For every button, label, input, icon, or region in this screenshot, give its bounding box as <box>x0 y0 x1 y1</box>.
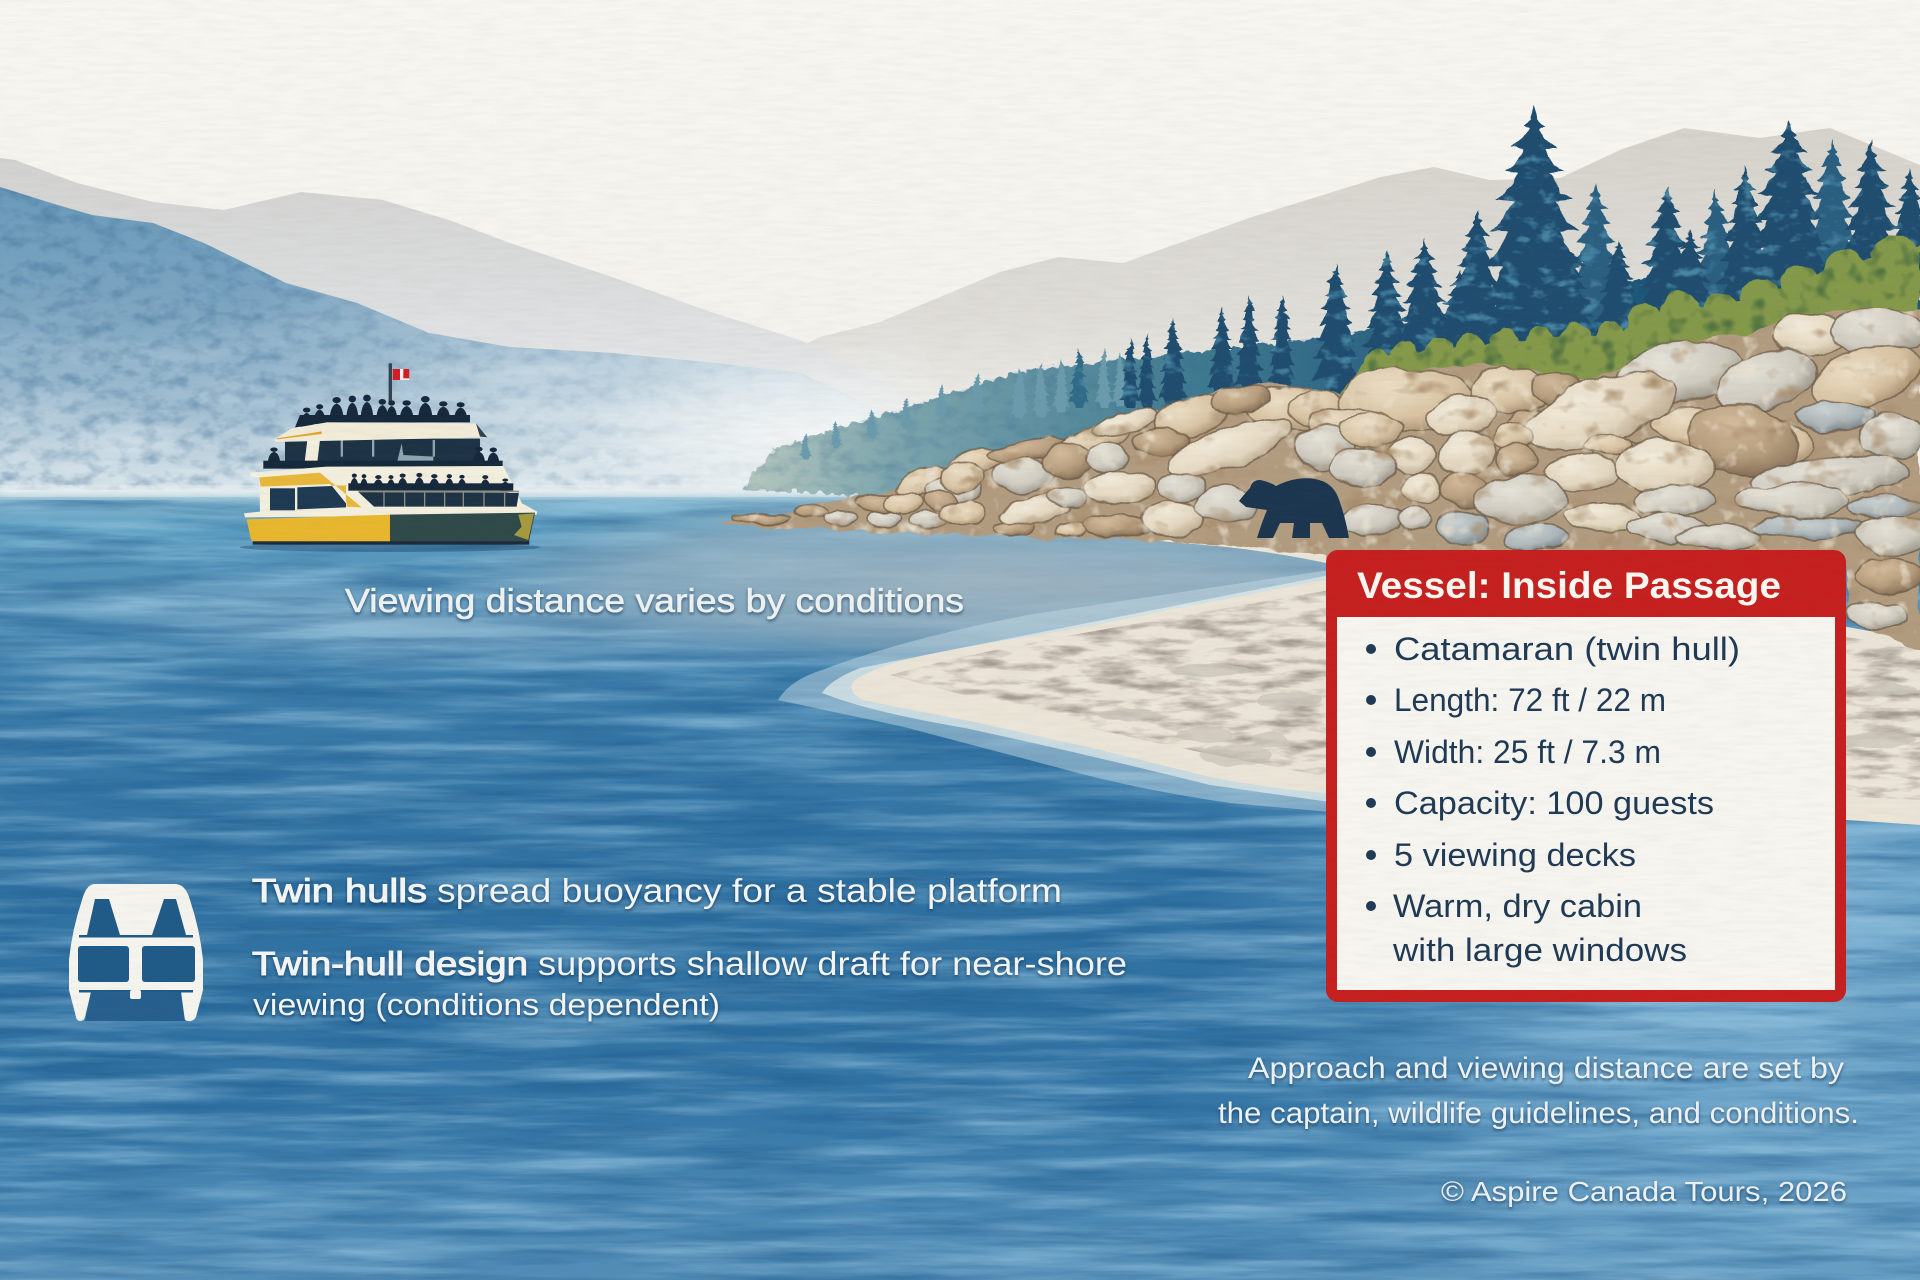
upper window highlights <box>341 440 435 464</box>
canadian flag <box>393 369 409 380</box>
yellow side panel <box>259 473 362 507</box>
spec: cabin: Warm, dry cabin <box>1393 888 1642 924</box>
spec: cabin: with large windows <box>1392 932 1687 968</box>
note line two: the captain, wildlife guidelines, and conditions. <box>1218 1097 1859 1130</box>
upper cabin windows <box>285 439 480 467</box>
small far conifers <box>800 348 1128 458</box>
cabin pillar <box>305 440 320 462</box>
panel frame <box>1326 550 1846 1002</box>
mountain forest texture <box>0 187 980 490</box>
hull bow highlight <box>514 513 534 540</box>
spec: length: Length: 72 ft / 22 m <box>1394 682 1666 718</box>
lower deck passengers <box>348 473 513 491</box>
lower deck windows <box>358 492 519 507</box>
ship <box>240 363 540 552</box>
bold lead: Twin-hull design <box>252 945 528 982</box>
spec: capacity: Capacity: 100 guests <box>1394 785 1714 821</box>
mid left window <box>78 946 129 982</box>
spec: catamaran: Catamaran (twin hull) <box>1394 631 1740 667</box>
rock base <box>716 310 1920 650</box>
right fade of mountain <box>250 270 980 490</box>
left windows <box>270 486 346 510</box>
dark ripple streaks <box>0 500 1920 1280</box>
sentence: supports shallow draft for near-shore <box>538 945 1127 982</box>
icon hull outline <box>69 884 203 1021</box>
mountain mist bands <box>0 325 660 488</box>
light water by spit <box>1200 700 1920 1280</box>
far left mountain ridge <box>0 158 980 490</box>
mid deck crowd <box>263 447 503 469</box>
far right mountain ridge <box>690 128 1920 440</box>
top deck passengers <box>295 395 470 427</box>
spit pebbles <box>1098 664 1918 766</box>
spec: decks: 5 viewing decks <box>1394 837 1636 873</box>
boulder shoreline <box>716 308 1920 650</box>
water reflection <box>240 543 540 552</box>
sand spit <box>778 535 1920 825</box>
copyright: © Aspire Canada Tours, 2026 <box>1441 1176 1847 1207</box>
lower rail <box>358 491 519 507</box>
outer foam edge <box>778 570 1330 812</box>
forest texture <box>743 240 1920 500</box>
dark hull <box>390 513 535 544</box>
text: approach note <box>1218 1052 1859 1130</box>
spec: width: Width: 25 ft / 7.3 m <box>1394 734 1661 770</box>
water base <box>0 490 1920 1280</box>
background sky <box>0 0 1920 500</box>
top right window <box>152 899 186 935</box>
grey-blue bay <box>440 490 1520 670</box>
bold lead: Twin hulls <box>252 872 427 909</box>
second line: viewing (conditions dependent) <box>253 987 720 1022</box>
dark conifer treeline <box>1069 104 1920 408</box>
panel: vessel specs <box>1326 550 1846 1002</box>
green bushes <box>1340 234 1920 400</box>
water <box>0 486 1920 1280</box>
spit pebble texture <box>890 575 1920 800</box>
pale sweep below ship <box>0 552 802 698</box>
spec: cabin <box>1366 888 1687 968</box>
lower deck line <box>79 990 193 992</box>
panel heading: Vessel: Inside Passage <box>1357 565 1781 606</box>
blue left mountain <box>0 187 980 490</box>
sentence: spread buoyancy for a stable platform <box>437 872 1062 909</box>
light ripple streaks <box>0 500 1920 1280</box>
waterline <box>253 541 529 545</box>
flag pole <box>389 363 392 405</box>
forested hillside <box>743 104 1920 500</box>
spit body <box>851 565 1920 825</box>
text: twin hulls <box>252 872 1062 909</box>
inner foam edge <box>822 575 1330 802</box>
text: twin-hull design <box>252 945 1127 1022</box>
panel body <box>1337 617 1835 990</box>
hazy forest slope <box>743 240 1920 500</box>
roof <box>274 422 487 442</box>
top left window <box>87 899 120 935</box>
icon: bear silhouette <box>1239 478 1349 538</box>
label: viewing distance: Viewing distance varies by conditions <box>345 582 964 619</box>
upper deck line <box>79 935 193 938</box>
note line one: Approach and viewing distance are set by <box>1248 1052 1844 1085</box>
mid right window <box>142 946 195 982</box>
distant mountains <box>0 128 1920 500</box>
main deck <box>244 466 537 517</box>
white window surround <box>261 484 347 512</box>
horizon haze <box>0 486 860 496</box>
lower light water <box>0 1120 1920 1280</box>
centre keel stub <box>130 990 141 999</box>
roof stripe <box>277 431 322 439</box>
icon: catamaran cross-section <box>69 884 203 1021</box>
valley haze <box>570 360 1030 500</box>
yellow hull <box>247 515 391 543</box>
upper beach strip <box>1100 535 1340 566</box>
roof edge <box>476 423 487 437</box>
bay ripples <box>820 550 1340 630</box>
lower gap <box>85 992 185 1021</box>
spec list <box>1366 631 1740 968</box>
